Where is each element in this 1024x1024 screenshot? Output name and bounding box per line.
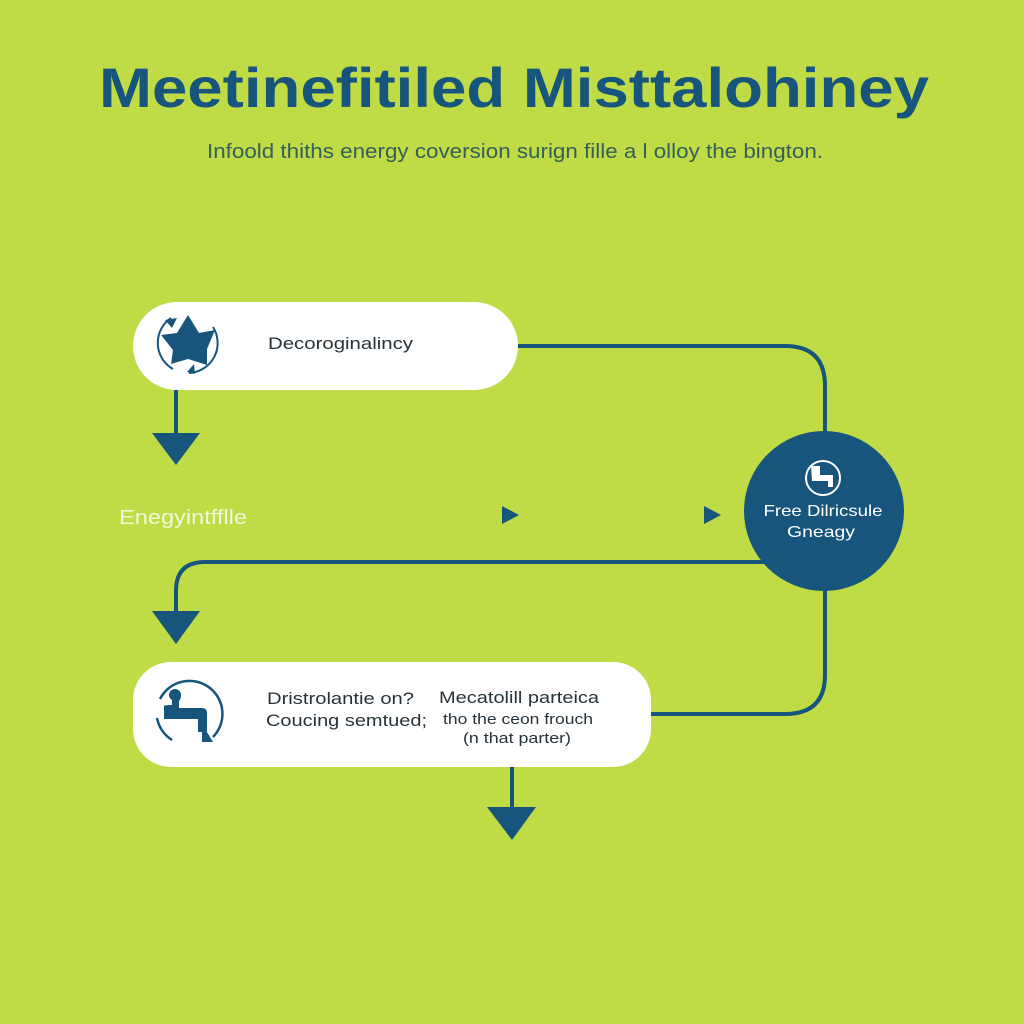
- icon: pipe with ring: [157, 681, 222, 742]
- icon: star with cycle arrows: [158, 315, 218, 374]
- label: energy: Enegyintfflle: [119, 507, 247, 529]
- text: bottom card right: tho the ceon frouch: [443, 711, 593, 728]
- panel: circle node: [744, 431, 904, 591]
- subtitle: Infoold thiths energy coversion surign fille a l olloy the bington.: [207, 141, 823, 163]
- connector: circle to bottom card: [650, 588, 825, 714]
- label: circle node: Free Dilricsule: [764, 503, 883, 520]
- arrow: lower left: [152, 611, 200, 644]
- title: Meetinefitiled Misttalohiney: [99, 56, 929, 119]
- connector: circle to lower arrow: [176, 562, 765, 615]
- arrow: from top card down: [152, 390, 200, 465]
- text: bottom card left: Dristrolantie on?: [267, 689, 414, 708]
- panel: top card: [133, 302, 518, 390]
- panel: circle node: Gneagy: [787, 524, 855, 541]
- connector: top card to circle: [517, 346, 825, 436]
- label: top card: Decoroginalincy: [268, 334, 414, 353]
- panel: bottom card: [133, 662, 651, 767]
- text: bottom card right: (n that parter): [463, 730, 571, 747]
- text: bottom card right: Mecatolill parteica: [439, 688, 600, 707]
- arrow: from bottom card down: [487, 767, 536, 840]
- text: bottom card left: [266, 689, 427, 730]
- arrow: small right 2: [704, 506, 721, 524]
- icon: pipe in circle: [806, 461, 840, 495]
- text: bottom card left: Coucing semtued;: [266, 711, 427, 730]
- text: bottom card right: [439, 688, 600, 747]
- arrow: small right 1: [502, 506, 519, 524]
